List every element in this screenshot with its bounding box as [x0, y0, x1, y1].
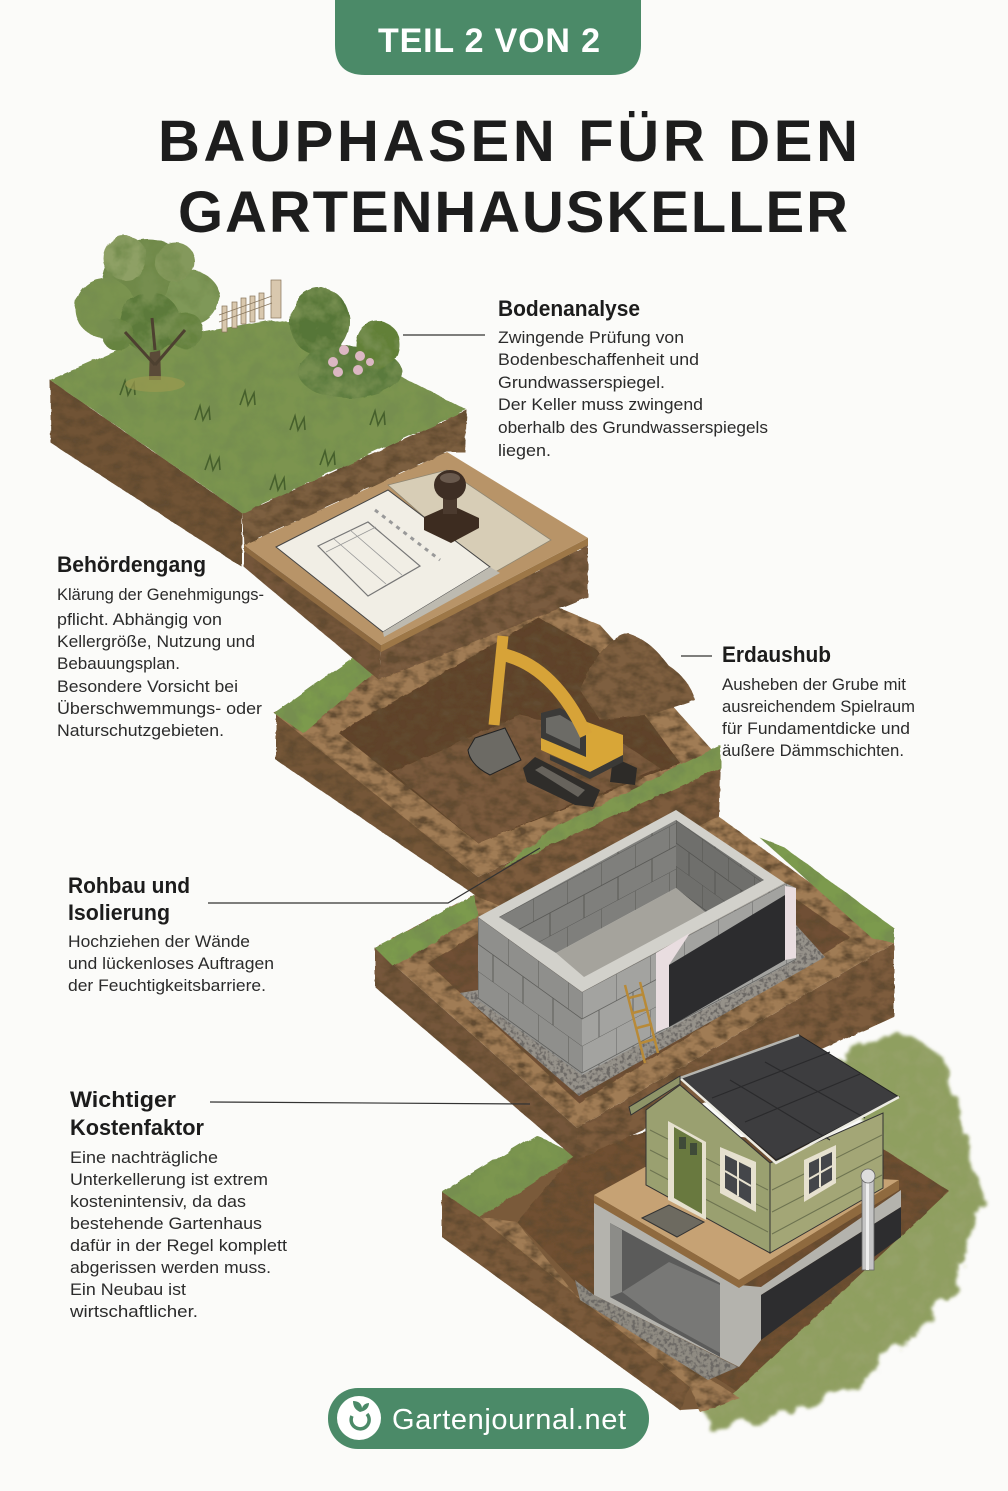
soil left face	[276, 713, 478, 897]
text block: Behördengang	[57, 552, 264, 740]
house walls	[646, 1085, 883, 1253]
soil right face	[242, 410, 467, 545]
header tab: Teil 2 von 2: TEIL 2 VON 2	[378, 22, 600, 60]
grass strips	[375, 895, 478, 967]
text block: Bodenanalyse: Zwingende Prüfung von	[498, 328, 684, 347]
text block: Erdaushub: Erdaushub	[722, 642, 831, 667]
pit	[428, 815, 850, 1103]
earth pile	[580, 633, 695, 720]
excavator	[468, 636, 637, 807]
text block: Behördengang: pflicht. Abhängig von	[57, 610, 222, 629]
floor	[556, 888, 705, 977]
bucket	[468, 728, 521, 775]
text block: Wichtiger Kostenfaktor: Ein Neubau ist	[70, 1280, 186, 1299]
fence	[219, 280, 281, 332]
icon: sprout logo	[337, 1396, 381, 1440]
text block: Erdaushub	[681, 642, 915, 760]
footer logo pill	[328, 1388, 649, 1449]
text block: Bodenanalyse: Der Keller muss zwingend	[498, 395, 703, 414]
right track	[610, 757, 637, 785]
gravel	[460, 925, 825, 1096]
text block: Behördengang: Bebauungsplan.	[57, 654, 180, 673]
soil rim	[479, 1217, 740, 1412]
level 3: excavation pit	[274, 600, 721, 910]
flowering bush	[290, 288, 402, 398]
text block: Bodenanalyse: Grundwasserspiegel.	[498, 373, 665, 392]
text block: Behördengang: Besondere Vorsicht bei	[57, 677, 238, 696]
soil base	[442, 1149, 949, 1410]
black waterproof membrane	[669, 895, 785, 1027]
garden house on basement	[594, 1035, 901, 1367]
roof	[629, 1035, 899, 1163]
soil left face	[50, 380, 242, 567]
lawn patch	[442, 1135, 576, 1217]
title: GARTENHAUSKELLER	[178, 180, 848, 245]
text block: Wichtiger Kostenfaktor: dafür in der Regel komplett	[70, 1236, 287, 1255]
text block: Bodenanalyse: Bodenanalyse	[498, 296, 640, 321]
body	[541, 715, 623, 772]
text block: Bodenanalyse: Bodenbeschaffenheit und	[498, 350, 699, 369]
text block: Behördengang: Behördengang	[57, 552, 206, 577]
open plan book	[276, 490, 500, 637]
pit back wall	[517, 1130, 949, 1391]
text block: Behördengang: Kellergröße, Nutzung und	[57, 632, 255, 651]
rim	[478, 810, 785, 992]
soil left face	[375, 948, 577, 1160]
text block: Wichtiger Kostenfaktor: Kostenfaktor	[70, 1115, 204, 1140]
text block: Rohbau und Isolierung	[68, 848, 540, 995]
wooden platform	[244, 452, 588, 645]
text block: Wichtiger Kostenfaktor	[69, 1087, 530, 1321]
ladder	[625, 982, 658, 1063]
stick	[494, 636, 503, 725]
text block: Rohbau und Isolierung: und lückenloses Auftragen	[68, 954, 274, 973]
wooden deck	[594, 1167, 899, 1288]
text block: Bodenanalyse: oberhalb des Grundwasserspiegels	[498, 418, 768, 437]
inner wall	[499, 820, 676, 953]
pink insulation strip	[656, 933, 690, 1032]
header tab: Teil 2 von 2	[335, 0, 641, 75]
stamp	[424, 470, 479, 543]
vent pipe	[861, 1169, 875, 1270]
grass top	[50, 320, 467, 513]
title	[158, 109, 858, 245]
soil block left face	[442, 1192, 690, 1410]
outer lawn on the right	[700, 1030, 982, 1432]
text block: Rohbau und Isolierung: Isolierung	[68, 900, 170, 925]
text block: Rohbau und Isolierung: Hochziehen der Wände	[68, 932, 250, 951]
level 4: excavation soil	[375, 815, 894, 1160]
text block: Erdaushub: für Fundamentdicke und	[722, 719, 910, 738]
level 5: ground around the garden house	[442, 1030, 982, 1432]
title: BAUPHASEN FÜR DEN	[158, 109, 858, 174]
text block: Behördengang: Überschwemmungs- oder	[57, 699, 262, 718]
text block: Erdaushub: Ausheben der Grube mit	[722, 675, 906, 694]
text block: Rohbau und Isolierung: der Feuchtigkeitsbarriere.	[68, 976, 266, 995]
soil right face	[577, 943, 894, 1160]
text block: Wichtiger Kostenfaktor: Unterkellerung ist extrem	[70, 1170, 268, 1189]
text block: Bodenanalyse	[403, 296, 768, 460]
door	[668, 1121, 706, 1220]
boom	[505, 655, 586, 735]
text block: Wichtiger Kostenfaktor: Wichtiger	[70, 1087, 176, 1112]
text block: Wichtiger Kostenfaktor: bestehende Gartenhaus	[70, 1214, 262, 1233]
footer logo pill: Gartenjournal.net	[392, 1404, 626, 1436]
basement block wall	[594, 1190, 901, 1367]
text block: Behördengang: Naturschutzgebieten.	[57, 721, 224, 740]
grass tufts	[120, 381, 385, 490]
text block: Wichtiger Kostenfaktor: kostenintensiv, da das	[70, 1192, 246, 1211]
text block: Wichtiger Kostenfaktor: Eine nachträgliche	[70, 1148, 218, 1167]
text block: Rohbau und Isolierung: Rohbau und	[68, 873, 190, 898]
level 1: plot with grass	[50, 236, 467, 567]
pit floor	[392, 715, 660, 843]
block building shell	[478, 810, 796, 1075]
text block: Bodenanalyse: liegen.	[498, 441, 551, 460]
gravel strip	[575, 1280, 738, 1380]
level 2: permit platform	[244, 452, 588, 680]
text block: Erdaushub: ausreichendem Spielraum	[722, 697, 915, 716]
text block: Wichtiger Kostenfaktor: wirtschaftlicher.	[69, 1302, 198, 1321]
text block: Wichtiger Kostenfaktor: abgerissen werden muss.	[70, 1258, 271, 1277]
rim	[274, 600, 721, 877]
pit walls	[339, 618, 680, 843]
text block: Erdaushub: äußere Dämmschichten.	[722, 741, 904, 760]
soil rim top	[375, 817, 894, 1128]
cab	[541, 708, 586, 757]
left track	[523, 757, 600, 807]
soil faces	[244, 545, 381, 680]
soil right face	[478, 760, 721, 910]
tree	[75, 236, 219, 392]
text block: Behördengang: Klärung der Genehmigungs-	[57, 585, 264, 604]
door mat	[642, 1205, 704, 1237]
window left	[720, 1147, 756, 1212]
grass	[274, 658, 380, 733]
window right	[804, 1145, 836, 1202]
back sheet	[388, 470, 551, 575]
